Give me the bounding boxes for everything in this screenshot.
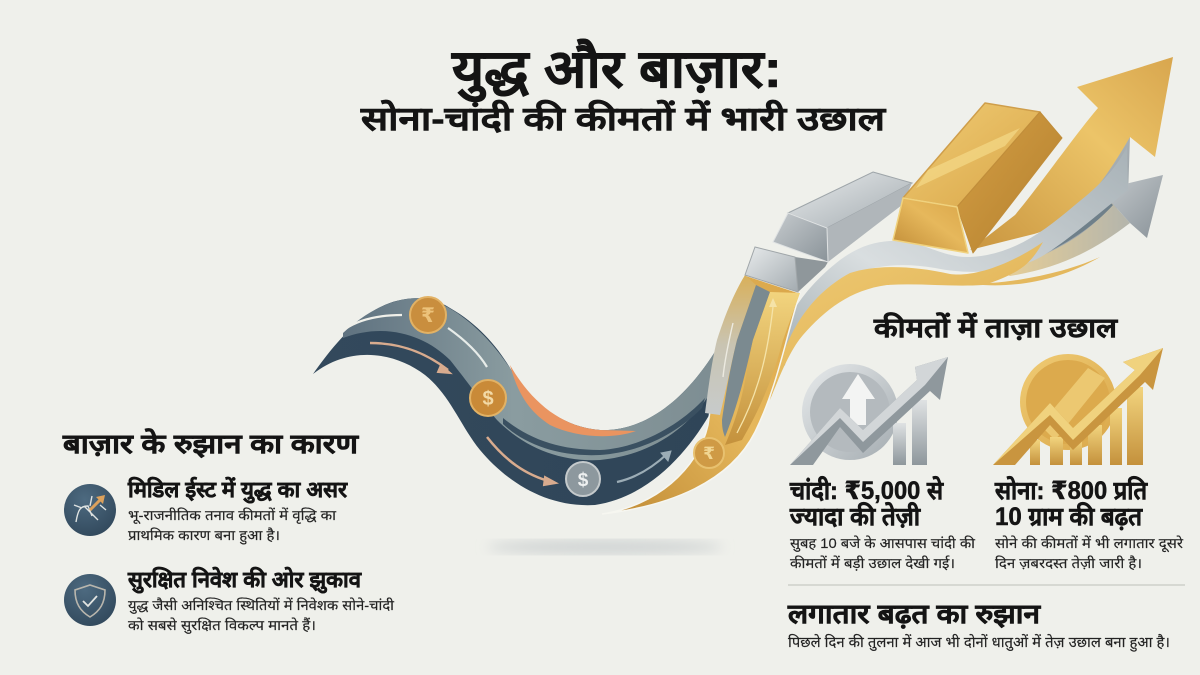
dark stripe	[503, 398, 705, 455]
gold stat: दिन ज़बरदस्त तेज़ी जारी है।	[995, 555, 1142, 571]
reason 2: युद्ध जैसी अनिश्चित स्थितियों में निवेशक सोने-चांदी	[128, 597, 394, 614]
silver icon	[790, 357, 948, 465]
flow lines	[345, 315, 402, 329]
coin: silver dollar: $	[578, 470, 589, 491]
icon: middle east war	[64, 484, 116, 536]
coin: dollar: $	[482, 388, 494, 410]
section heading: fresh jump: कीमतों में ताज़ा उछाल	[873, 312, 1119, 343]
gold stat: सोने की कीमतों में भी लगातार दूसरे	[995, 535, 1183, 553]
reason 2: सुरक्षित निवेश की ओर झुकाव	[127, 566, 362, 594]
coin: gold rupee	[694, 438, 724, 468]
reason 1: भू-राजनीतिक तनाव कीमतों में वृद्धि का	[128, 507, 336, 524]
coin: dollar	[470, 380, 506, 416]
continuing trend: लगातार बढ़त का रुझान	[787, 599, 1041, 629]
gold stat: सोना: ₹800 प्रति	[994, 476, 1149, 505]
reason 2: को सबसे सुरक्षित विकल्प मानते हैं।	[128, 617, 316, 634]
dark market ribbon	[313, 298, 722, 505]
silver stat: चांदी: ₹5,000 से	[789, 476, 944, 505]
silver stat: ज्यादा की तेज़ी	[789, 502, 921, 531]
coin: rupee	[410, 297, 446, 333]
reason 1: मिडिल ईस्ट में युद्ध का असर	[127, 476, 348, 504]
silver stat: कीमतों में बड़ी उछाल देखी गई।	[790, 555, 955, 571]
gold ribbon	[602, 275, 800, 514]
silver bar upper	[773, 172, 912, 262]
gold rising arrow	[970, 57, 1173, 250]
gold icon	[993, 348, 1163, 465]
title: युद्ध और बाज़ार:	[451, 38, 782, 103]
left strand	[705, 275, 756, 415]
grey right arrow	[1000, 175, 1163, 276]
continuing trend: पिछले दिन की तुलना में आज भी दोनों धातुओं में तेज़ उछाल बना हुआ है।	[788, 634, 1170, 652]
reason 2	[127, 566, 394, 634]
silver and gold sweep	[768, 147, 1128, 400]
bright strand	[725, 292, 800, 445]
ground shadow	[487, 540, 723, 554]
coin: rupee: ₹	[421, 305, 435, 327]
silver rear arrow	[1030, 137, 1130, 262]
title: सोना-चांदी की कीमतों में भारी उछाल	[360, 99, 887, 137]
reason 1	[127, 476, 348, 545]
silver stat: सुबह 10 बजे के आसपास चांदी की	[790, 535, 975, 552]
silver stat	[789, 476, 975, 571]
orange band	[510, 365, 636, 436]
silver bar lower	[745, 238, 828, 292]
gold bar	[893, 103, 1062, 253]
coin: silver dollar	[566, 462, 600, 496]
gold stat: 10 ग्राम की बढ़त	[995, 502, 1144, 531]
title	[360, 38, 887, 137]
coin: gold rupee: ₹	[703, 444, 715, 463]
icon: shield	[64, 574, 116, 626]
gold stat	[994, 476, 1183, 571]
section heading: reasons: बाज़ार के रुझान का कारण	[62, 428, 360, 459]
reason 1: प्राथमिक कारण बना हुआ है।	[128, 527, 280, 545]
grey strand	[722, 285, 770, 437]
continuing trend	[787, 599, 1170, 652]
grey band	[343, 298, 722, 460]
